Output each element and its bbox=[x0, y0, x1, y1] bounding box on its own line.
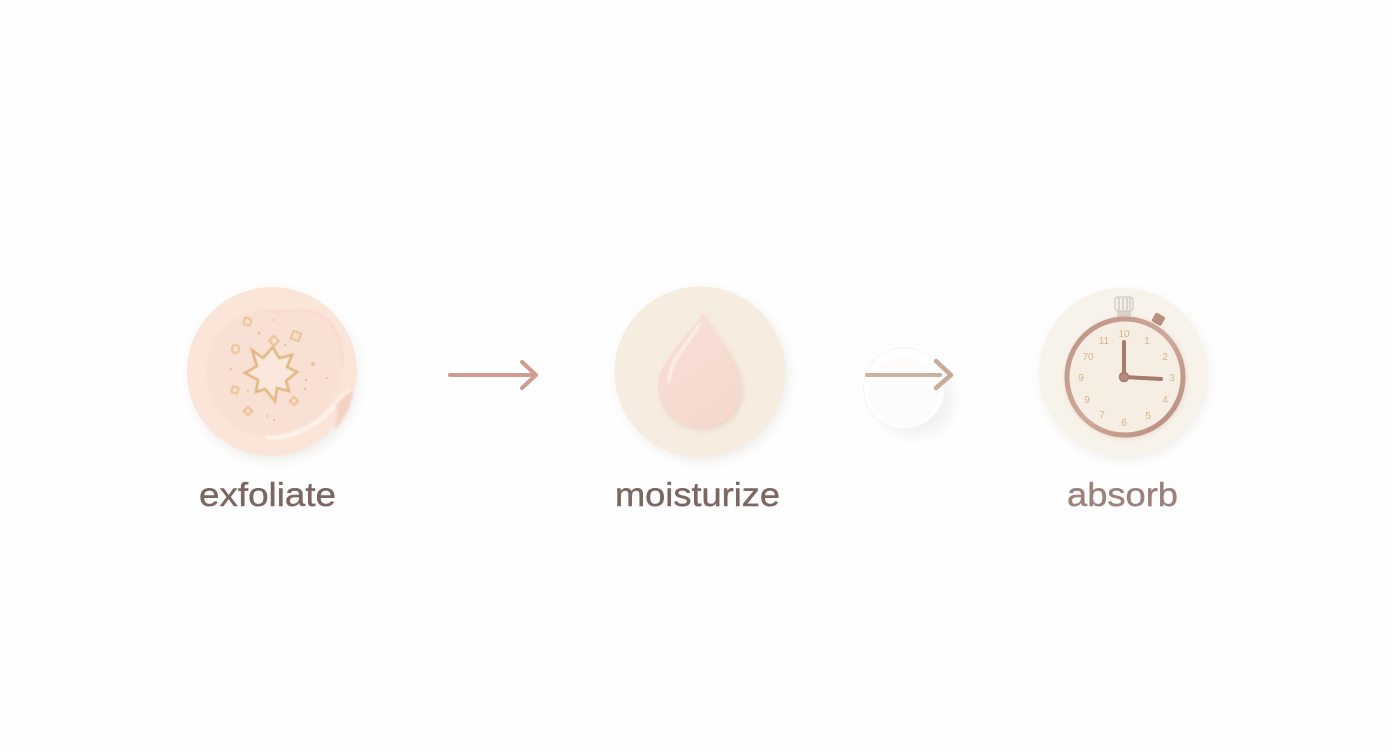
clock numerals: 4 bbox=[1162, 395, 1168, 406]
icon: stopwatch disc bbox=[1039, 288, 1208, 459]
stopwatch crown bbox=[1115, 297, 1133, 318]
clock numerals bbox=[1078, 329, 1175, 429]
sparkles bbox=[231, 317, 301, 415]
clock numerals: 5 bbox=[1145, 411, 1151, 422]
clock numerals: 9 bbox=[1084, 395, 1090, 406]
clock numerals: 1 bbox=[1144, 336, 1150, 347]
label: exfoliate: exfoliate bbox=[199, 476, 336, 513]
icon: gold star bbox=[245, 347, 297, 401]
icon: moisturize disc bbox=[614, 286, 787, 460]
clock numerals: 2 bbox=[1162, 352, 1168, 363]
arrow: moisturize to absorb bbox=[867, 361, 951, 388]
clock numerals: 7 bbox=[1099, 410, 1105, 421]
clock numerals: 3 bbox=[1169, 373, 1175, 384]
stopwatch button bbox=[1151, 312, 1166, 326]
clock numerals: 70 bbox=[1082, 352, 1094, 363]
icon: white cup bbox=[863, 347, 954, 436]
label: absorb: absorb bbox=[1067, 476, 1178, 513]
clock numerals: 9 bbox=[1078, 373, 1084, 384]
clock numerals: 6 bbox=[1121, 418, 1127, 429]
clock hands bbox=[1120, 342, 1161, 382]
arrow: exfoliate to moisturize bbox=[450, 362, 536, 388]
clock numerals: 11 bbox=[1099, 336, 1110, 347]
icon: exfoliate wax disc bbox=[187, 287, 358, 460]
step: absorb bbox=[1039, 288, 1208, 513]
label: moisturize: moisturize bbox=[615, 476, 780, 513]
clock numerals: 10 bbox=[1118, 329, 1130, 340]
step: moisturize bbox=[614, 286, 787, 513]
step: exfoliate bbox=[187, 287, 358, 513]
icon: pink drop bbox=[658, 313, 743, 430]
stopwatch face bbox=[1066, 318, 1186, 438]
